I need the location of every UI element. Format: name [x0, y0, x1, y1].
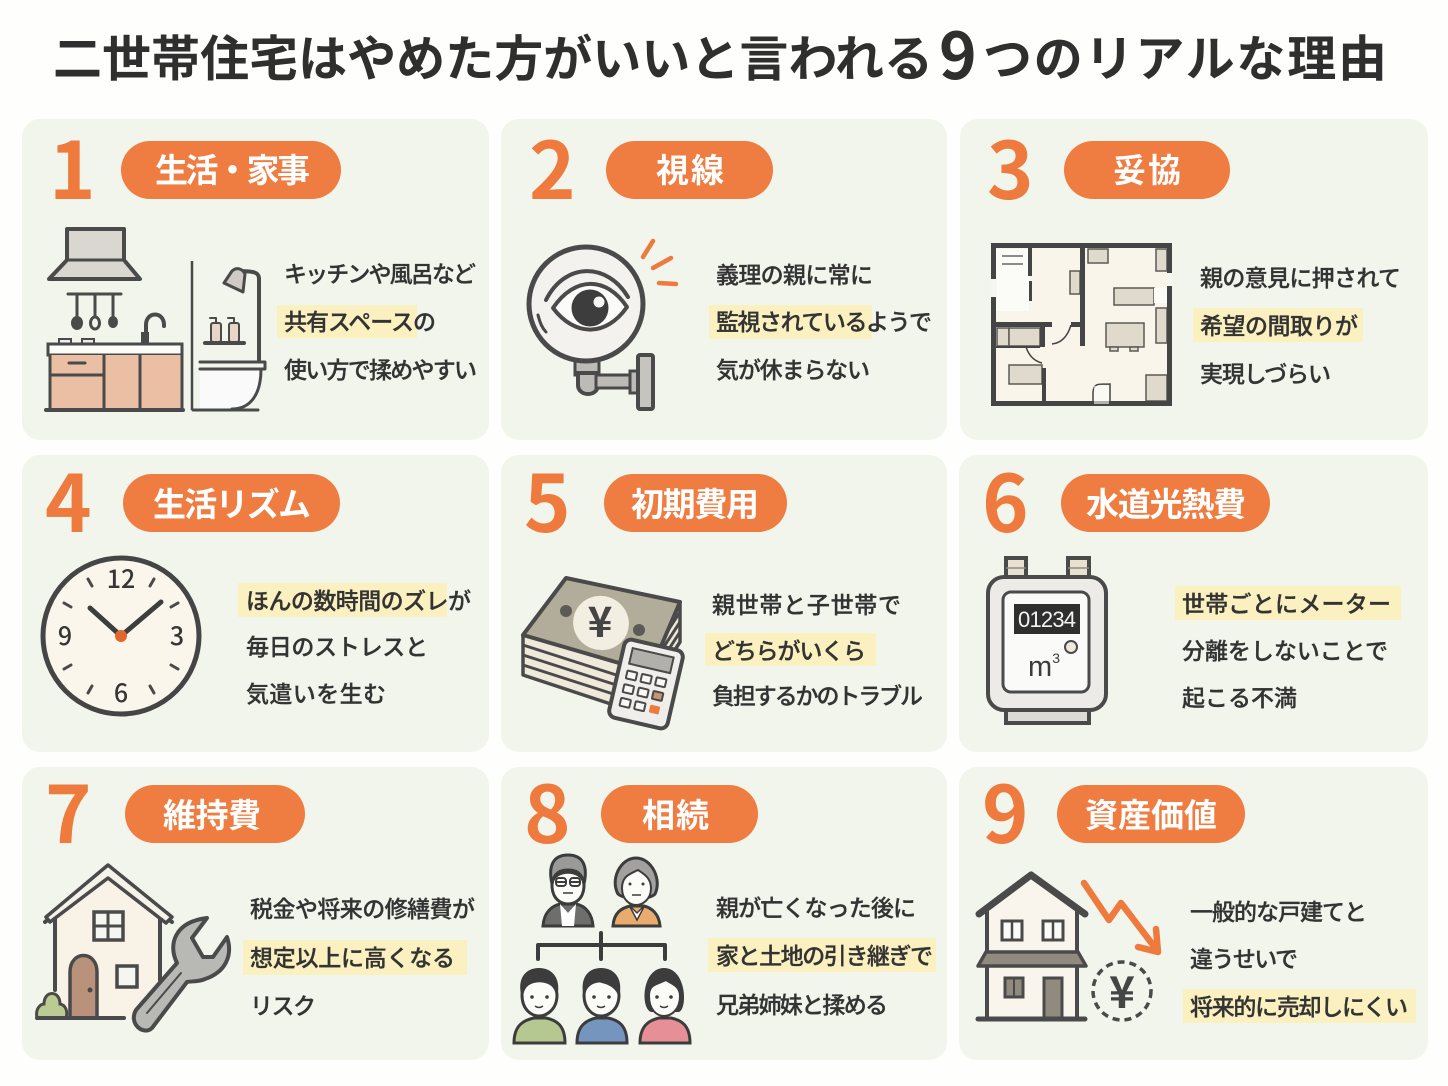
number 6: 6 [982, 440, 1029, 555]
pill heading: 視線 [656, 144, 724, 192]
child 1 [514, 968, 565, 1043]
pill heading [606, 141, 773, 199]
body text: 将来的に売却しにくい [1190, 988, 1408, 1022]
body text: 負担するかのトラブル [712, 677, 923, 711]
body text: 実現しづらい [1200, 355, 1331, 389]
body text [1175, 585, 1401, 713]
body text [708, 889, 936, 1020]
body text: 世帯ごとにメーター [1182, 585, 1391, 619]
icon: clock: 3 [170, 617, 184, 653]
icon: floor plan [991, 246, 1172, 404]
icon: utility meter: 3 [1052, 650, 1060, 666]
icon: clock: 9 [58, 617, 72, 653]
body text: 親が亡くなった後に [716, 889, 916, 923]
panel: 8 相続 [501, 751, 947, 1060]
pill heading: 維持費 [163, 789, 261, 837]
body text: ほんの数時間のズレが [246, 582, 471, 616]
icon: clock: 6 [114, 674, 128, 710]
number 9: 9 [982, 751, 1029, 866]
panel: 1 生活・家事 [22, 107, 489, 440]
body text [1183, 893, 1416, 1023]
pill heading: 相続 [642, 789, 709, 837]
body text [709, 256, 932, 385]
icon: house and wrench [37, 865, 229, 1031]
pill heading [1057, 785, 1245, 843]
number 5: 5 [524, 440, 571, 555]
pill heading [1061, 474, 1270, 532]
body text: 家と土地の引き継ぎで [716, 937, 933, 971]
pill heading: 妥協 [1113, 144, 1181, 192]
body text [705, 586, 923, 711]
pill heading [125, 785, 305, 843]
body text: 監視されているようで [716, 303, 932, 337]
pill heading [604, 474, 787, 532]
number 8: 8 [524, 751, 571, 866]
body text [243, 890, 475, 1021]
panel: 6 水道光熱費 [959, 440, 1428, 752]
pill heading [123, 474, 340, 532]
icon: cash stack and calculator: ¥ [588, 589, 613, 650]
icon: house with falling value: ¥ [1109, 957, 1135, 1021]
body text: 兄弟姉妹と揉める [716, 986, 888, 1020]
body text: 気が休まらない [716, 351, 870, 385]
icon: eye camera [529, 241, 676, 409]
body text: 希望の間取りが [1200, 307, 1358, 341]
body text [1193, 259, 1401, 389]
body text: 税金や将来の修繕費が [250, 890, 475, 924]
icon: kitchen and bath [46, 229, 265, 410]
body text: キッチンや風呂など [284, 255, 476, 289]
icon: utility meter: m [1028, 651, 1052, 683]
icon: clock [43, 558, 199, 714]
panel: 5 初期費用 [501, 440, 947, 752]
child 2 [577, 968, 627, 1043]
panel: 7 維持費 [22, 751, 489, 1060]
body text: 共有スペースの [284, 303, 436, 337]
body text: 使い方で揉めやすい [284, 351, 477, 385]
mother [613, 858, 660, 926]
pill heading: 生活・家事 [155, 144, 310, 192]
panel: 2 視線 [501, 107, 947, 440]
number 7: 7 [45, 751, 92, 866]
pill heading: 資産価値 [1085, 789, 1217, 837]
title: 二世帯住宅はやめた方がいいと言われる [53, 20, 933, 91]
title: つのリアルな理由 [983, 20, 1387, 91]
body text: 気遣いを生む [246, 675, 386, 709]
pill heading [601, 785, 758, 843]
body text: 違うせいで [1190, 940, 1298, 974]
body text: 起こる不満 [1182, 679, 1297, 713]
child 3 [640, 968, 690, 1043]
body text: 分離をしないことで [1182, 632, 1388, 666]
icon: clock: 12 [107, 560, 135, 596]
pill heading: 初期費用 [631, 478, 759, 526]
pill heading: 生活リズム [153, 478, 311, 526]
body text: リスク [250, 987, 316, 1021]
body text: 一般的な戸建てと [1190, 893, 1367, 927]
pill heading: 水道光熱費 [1086, 478, 1246, 526]
panel: 9 資産価値 [959, 751, 1428, 1060]
icon: cash stack and calculator [523, 578, 684, 730]
body text [238, 582, 471, 709]
pill heading [121, 141, 341, 199]
body text: 毎日のストレスと [246, 628, 428, 662]
title [53, 6, 1387, 98]
title: 9 [939, 6, 977, 98]
icon: house with falling value [978, 875, 1158, 1021]
icon: family tree [514, 855, 690, 1043]
number 2: 2 [529, 107, 576, 222]
icon: utility meter: 01234 [1018, 607, 1076, 632]
number 3: 3 [987, 107, 1034, 222]
pill heading [1064, 141, 1230, 199]
body text: 親世帯と子世帯で [712, 586, 901, 620]
body text [277, 255, 477, 385]
father [543, 855, 593, 926]
number 1: 1 [49, 107, 96, 222]
body text: 想定以上に高くなる [250, 939, 455, 973]
body text: 親の意見に押されて [1200, 259, 1401, 293]
panel: 3 妥協 [960, 107, 1428, 440]
icon: utility meter [988, 558, 1106, 723]
panel: 4 生活リズム [22, 440, 489, 752]
body text: どちらがいくら [712, 632, 866, 666]
body text: 義理の親に常に [716, 256, 873, 290]
number 4: 4 [45, 440, 92, 555]
